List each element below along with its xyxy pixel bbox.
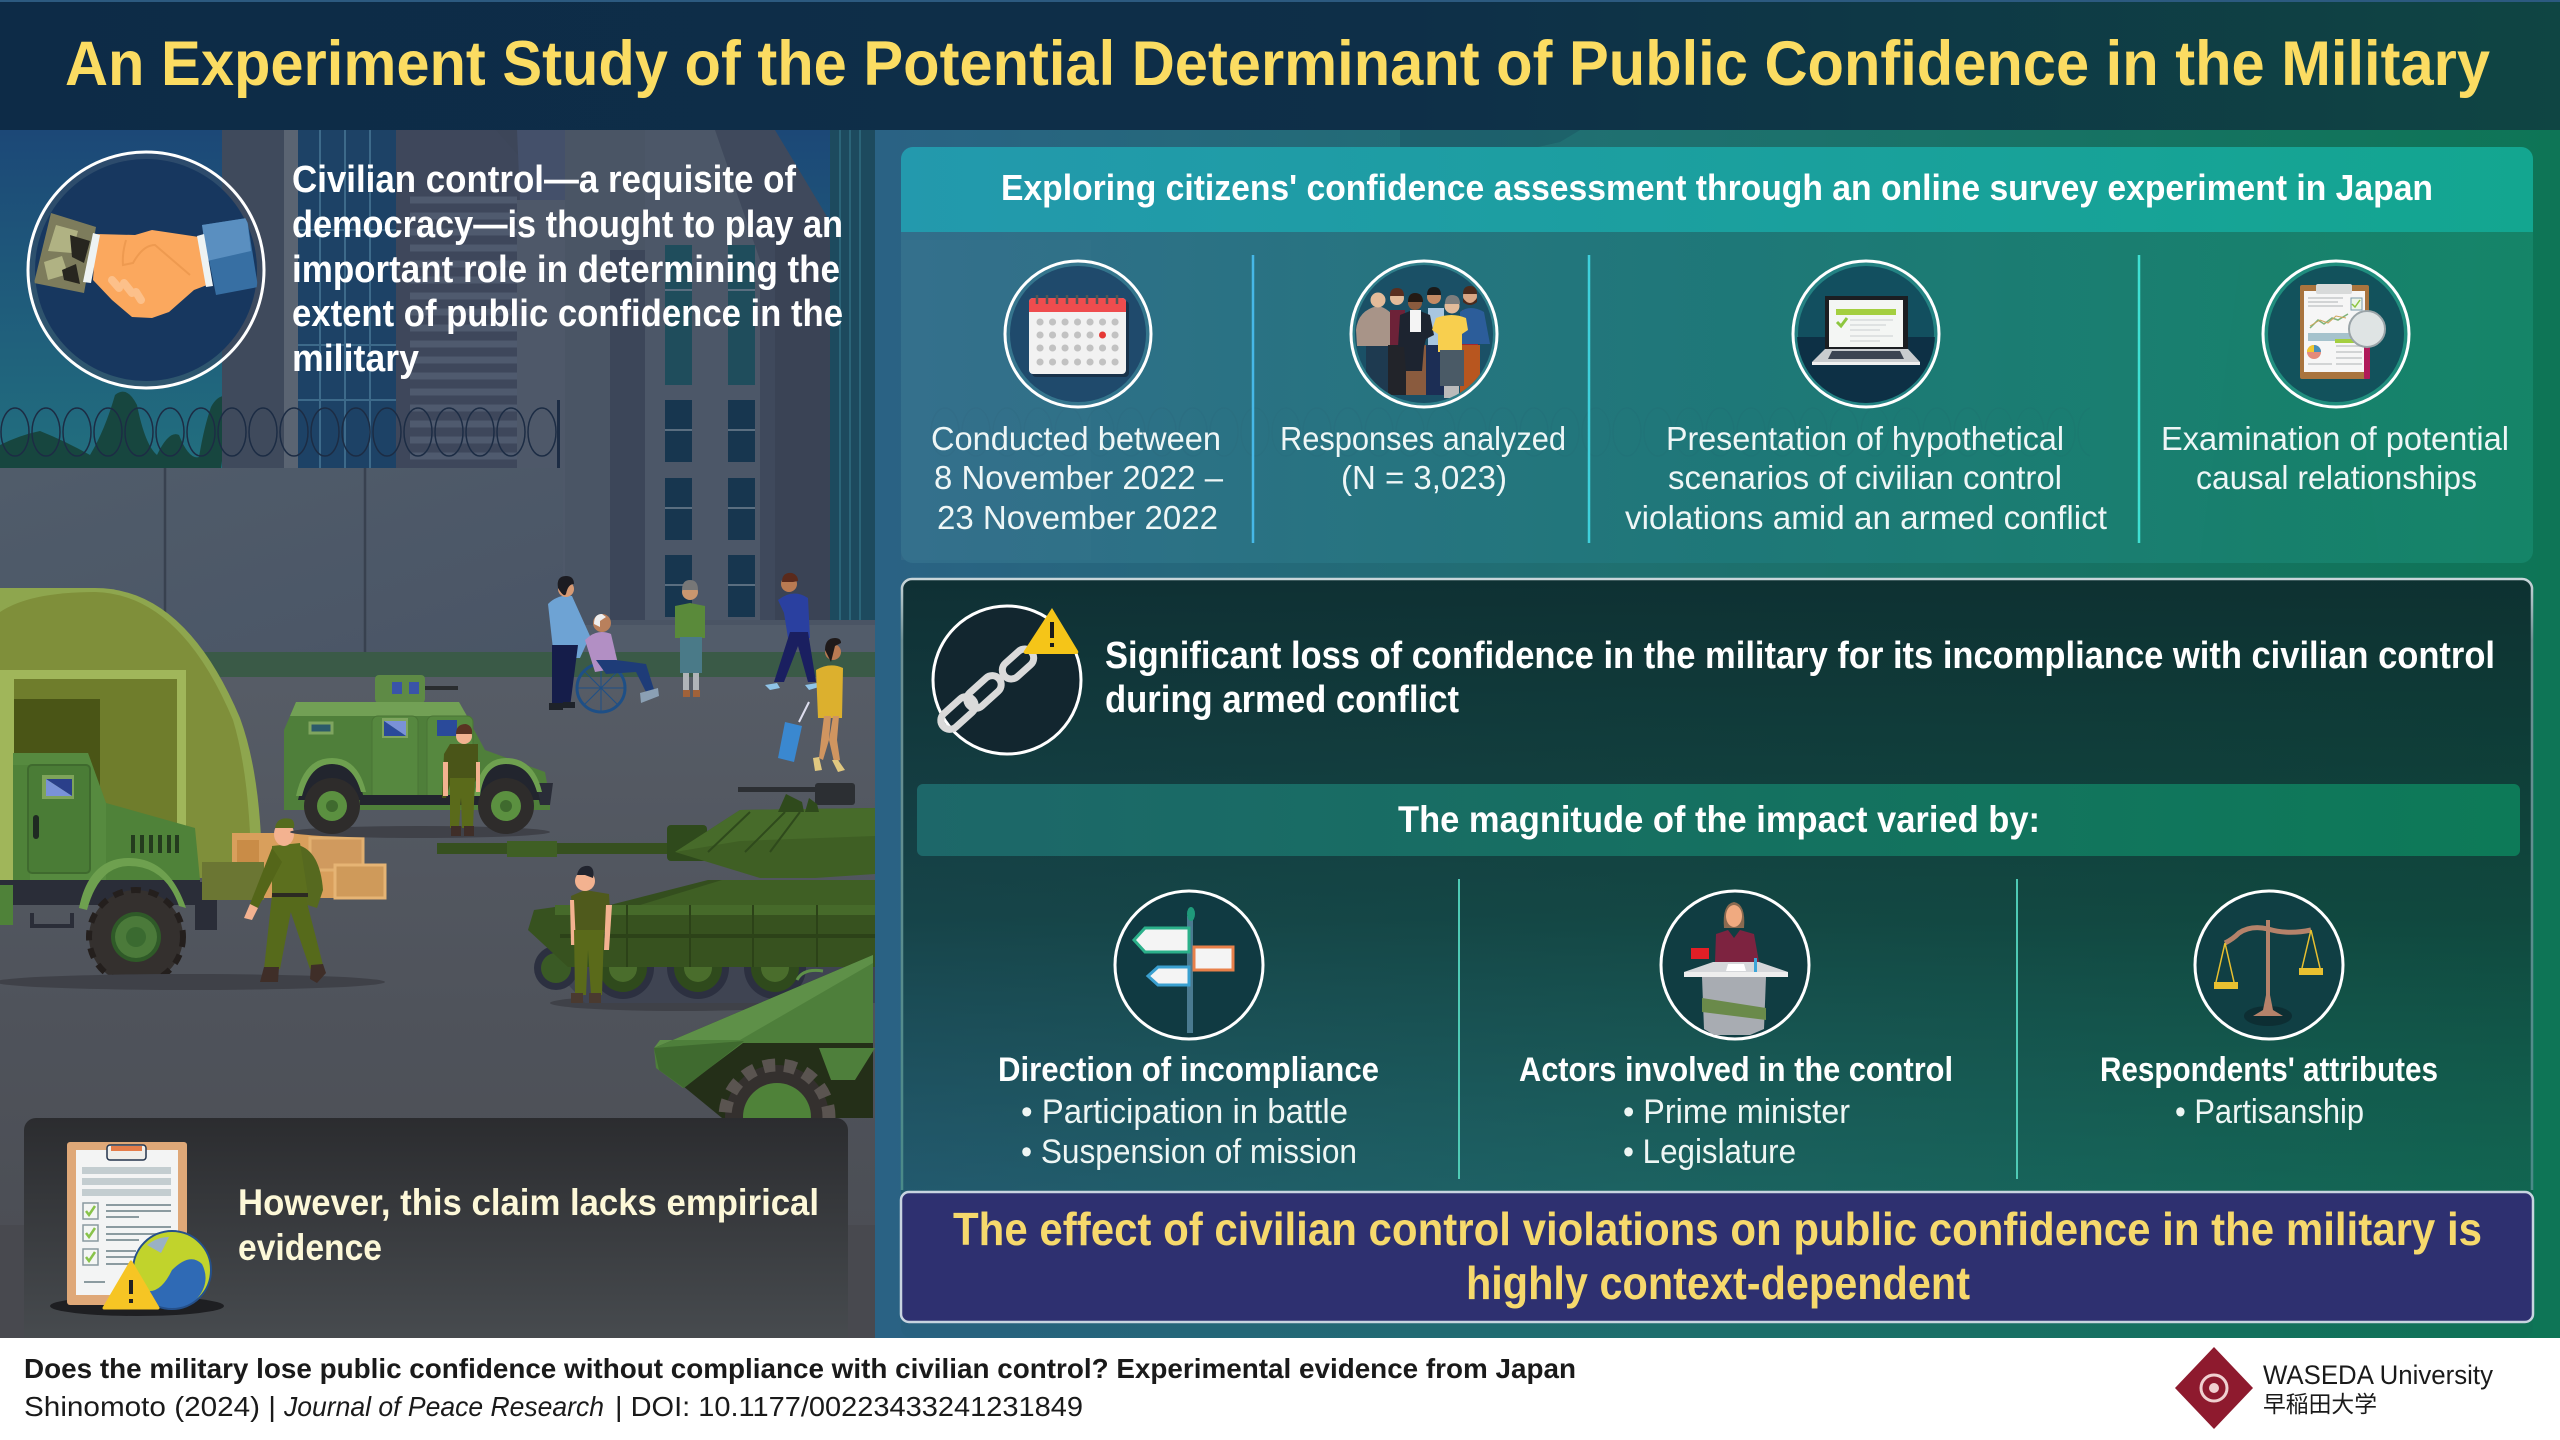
text: hypothetical scenarios: violations amid an armed conflict — [1625, 499, 2107, 536]
text: hypothetical scenarios: Presentation of hypothetical — [1666, 420, 2064, 457]
civilian: woman with suitcase — [778, 638, 845, 772]
supply boxes and case — [202, 833, 385, 900]
carrier wheel — [718, 1058, 836, 1118]
hedge strip — [204, 652, 875, 677]
text: survey dates: 8 November 2022 – — [934, 459, 1224, 496]
text: civilian control intro: extent of public confidence in the — [292, 293, 843, 335]
armored vehicle — [284, 675, 553, 838]
text: direction of incompliance: • Suspension of mission — [1021, 1133, 1357, 1171]
Waseda University logo: 早稲田大学 — [2263, 1391, 2377, 1417]
conclusion callout — [901, 1192, 2533, 1322]
footer — [0, 1338, 2560, 1440]
text: significant loss of confidence — [1105, 635, 2495, 721]
text: lacks empirical evidence — [239, 1188, 817, 1260]
title: An Experiment Study of the Potential Determinant of Public Confidence in the Military — [65, 29, 2490, 99]
panel heading band: Exploring citizens' confidence assessment through an online survey experiment in Japan — [1001, 167, 2433, 208]
text: lacks empirical evidence: evidence — [238, 1227, 382, 1268]
text: responses analyzed — [1280, 420, 1566, 496]
icon: speaker at podium — [1661, 891, 1809, 1039]
sub-heading band: magnitude: The magnitude of the impact varied by: — [1398, 799, 2040, 840]
tank machine gun — [738, 783, 855, 812]
panel: survey experiment — [901, 147, 2533, 563]
ground — [0, 677, 875, 1225]
text: civilian control intro: important role in determining the — [292, 249, 840, 291]
citation source: Journal of Peace Research — [283, 1391, 604, 1422]
panel heading band — [901, 147, 2533, 232]
military truck — [0, 753, 217, 984]
text: respondents attributes: Respondents' attributes — [2100, 1051, 2438, 1089]
soldier by vehicle — [442, 724, 480, 836]
civilian: woman in green — [675, 580, 705, 697]
razor wire fence — [0, 400, 560, 468]
icon: broken chain with warning — [933, 606, 1081, 754]
perimeter wall — [0, 468, 563, 652]
text: direction of incompliance: Direction of incompliance — [998, 1051, 1379, 1089]
text: responses analyzed: Responses analyzed — [1280, 420, 1566, 457]
text: respondents attributes: • Partisanship — [2175, 1093, 2364, 1131]
text: actors involved: Actors involved in the control — [1519, 1051, 1953, 1089]
text: civilian control intro: Civilian control—a requisite of — [292, 159, 796, 201]
Waseda University logo — [2175, 1347, 2493, 1429]
soldier by tank — [570, 866, 612, 1003]
text: causal relationships: causal relationships — [2196, 459, 2477, 496]
text: civilian control intro: military — [292, 338, 419, 380]
text: actors involved — [1519, 1051, 1953, 1171]
icon: balance scale — [2195, 891, 2343, 1039]
text: causal relationships — [2161, 420, 2509, 496]
armored personnel carrier foreground — [654, 955, 875, 1118]
armored vehicle wheels — [304, 778, 534, 834]
text: hypothetical scenarios: scenarios of civilian control — [1668, 459, 2062, 496]
walking soldier — [0, 818, 385, 990]
text: responses analyzed: (N = 3,023) — [1341, 459, 1507, 496]
tank road wheels — [534, 948, 806, 999]
icon: report and magnifier — [2263, 261, 2409, 407]
text: actors involved: • Prime minister — [1623, 1093, 1850, 1131]
text: survey dates: 23 November 2022 — [937, 499, 1218, 536]
icon: direction signpost — [1115, 891, 1263, 1039]
icon: clipboard with globe and warning — [50, 1142, 224, 1316]
panel: loss of confidence findings — [901, 578, 2533, 1338]
icon: laptop — [1793, 261, 1939, 407]
building plinth — [610, 620, 875, 625]
panel: empirical evidence callout — [24, 1118, 848, 1316]
hangar — [0, 588, 262, 880]
text: direction of incompliance — [998, 1051, 1379, 1171]
Waseda University logo: WASEDA University — [2263, 1360, 2493, 1390]
text: causal relationships: Examination of potential — [2161, 420, 2509, 457]
citation source: Shinomoto (2024) | — [24, 1391, 276, 1422]
citation source: | DOI: 10.1177/00223433241231849 — [615, 1391, 1083, 1422]
text: respondents attributes — [2100, 1051, 2438, 1131]
sky — [0, 130, 875, 475]
icon: calendar — [1005, 261, 1151, 407]
text: significant loss of confidence: during armed conflict — [1105, 679, 1459, 721]
civilian: man with phone — [765, 573, 819, 690]
city buildings — [222, 130, 875, 650]
truck wheel — [89, 890, 183, 984]
text: survey dates: Conducted between — [931, 420, 1221, 457]
right background — [875, 130, 2560, 1338]
text: actors involved: • Legislature — [1623, 1133, 1796, 1171]
text: survey dates — [931, 420, 1224, 536]
header bar — [0, 0, 2560, 130]
text: civilian control intro — [292, 159, 843, 380]
text: hypothetical scenarios — [1625, 420, 2107, 536]
text: lacks empirical evidence: However, this claim lacks empirical — [238, 1182, 819, 1223]
sub-heading band: magnitude — [917, 784, 2520, 856]
conclusion callout: highly context-dependent — [1466, 1257, 1970, 1309]
citation title: Does the military lose public confidence without compliance with civilian control? Experimental evidence from Japan — [24, 1353, 1576, 1384]
citation source — [24, 1391, 1083, 1422]
icon: handshake in circle — [28, 152, 264, 388]
civilians: man with wheelchair user — [548, 576, 659, 712]
text: civilian control intro: democracy—is thought to play an — [292, 204, 843, 246]
illustrated scene panel: military base with civilians — [0, 130, 875, 1348]
text: direction of incompliance: • Participation in battle — [1021, 1093, 1348, 1131]
battle tank — [437, 783, 875, 1011]
tree silhouettes — [0, 392, 231, 468]
icon: group of respondents — [1351, 261, 1497, 407]
